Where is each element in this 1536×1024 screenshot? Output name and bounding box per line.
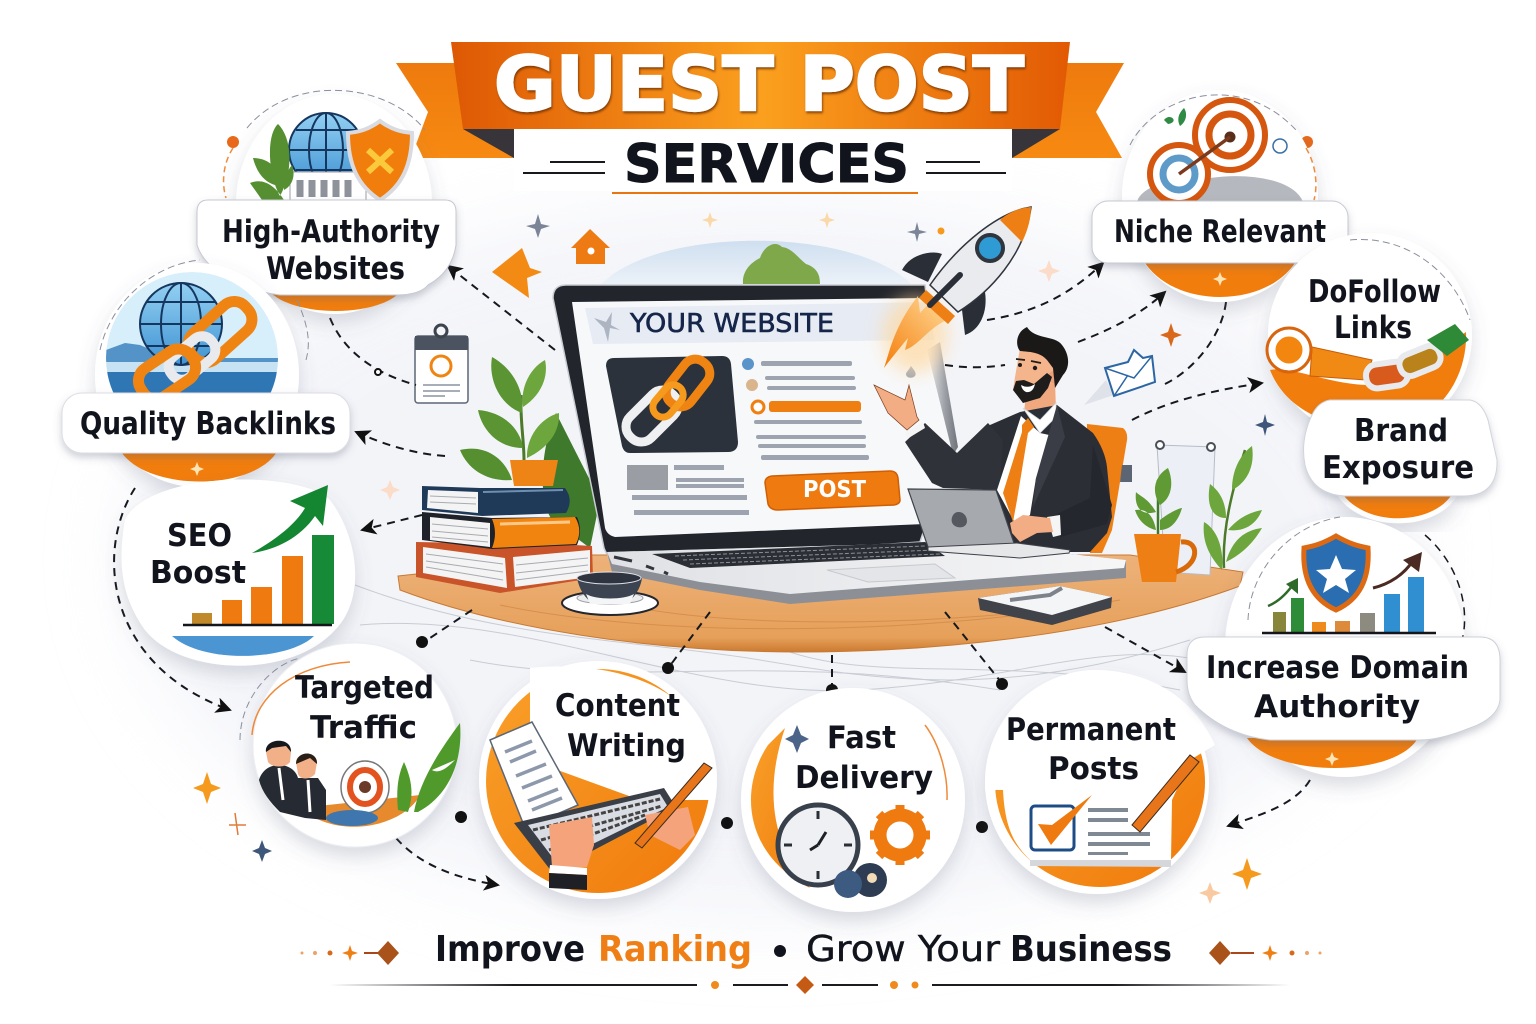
illustration disc	[106, 272, 278, 392]
coffee cup and saucer	[562, 572, 658, 615]
label text: Writing	[567, 728, 686, 764]
orange crescent	[751, 728, 810, 888]
link image tile	[606, 356, 738, 453]
label text: Websites	[266, 251, 405, 287]
label text: SEO	[167, 518, 232, 554]
tie	[1003, 418, 1034, 522]
label text	[295, 670, 434, 746]
icon: envelope	[1084, 350, 1155, 405]
small laptop	[908, 489, 1070, 558]
hands and sleeve	[549, 807, 695, 890]
rocket	[883, 207, 1031, 373]
middle book	[422, 512, 580, 549]
raised arm sleeve	[905, 423, 1003, 490]
label pill	[1092, 201, 1348, 263]
ear	[1048, 371, 1060, 383]
shirt collar	[1023, 403, 1056, 433]
tagline left ornament	[300, 941, 399, 965]
label text: Delivery	[795, 760, 933, 796]
orange base	[1142, 258, 1298, 297]
label text: Brand	[1354, 413, 1448, 449]
panel: fast delivery	[741, 688, 965, 912]
document	[490, 722, 578, 828]
document lines	[1088, 808, 1150, 855]
panel: niche relevant	[1092, 90, 1348, 302]
flame	[884, 296, 952, 368]
plane icon	[594, 312, 620, 342]
icon: clock	[778, 805, 858, 885]
laptop lid	[553, 285, 938, 562]
label text: Exposure	[1322, 450, 1474, 486]
label pill	[1187, 637, 1500, 740]
orange base	[1247, 738, 1418, 768]
icon: link key	[1267, 324, 1469, 390]
label text	[1322, 413, 1474, 486]
tagline text: Business	[1010, 929, 1172, 970]
raised cuff	[905, 422, 925, 439]
top book	[422, 486, 570, 516]
flame glow	[883, 297, 947, 373]
label text	[222, 214, 440, 287]
orange ground	[300, 795, 420, 827]
icon: plant	[397, 723, 460, 812]
white title area	[530, 666, 714, 800]
face	[1013, 348, 1058, 402]
title banner	[396, 40, 1124, 195]
panel: targeted traffic	[240, 643, 460, 847]
panel: brand exposure	[1304, 400, 1497, 521]
white cover	[985, 670, 1215, 860]
panel: dofollow links	[1267, 233, 1472, 437]
panel: high-authority websites	[197, 90, 456, 314]
icon: targets	[1150, 100, 1287, 203]
large plant behind laptop	[460, 357, 600, 548]
icon: shield	[1304, 536, 1368, 610]
chain	[133, 295, 258, 405]
neck	[1024, 380, 1056, 432]
icon: dark gears	[834, 863, 887, 898]
cloud	[1137, 176, 1303, 202]
label text: Targeted	[295, 670, 434, 706]
jacket torso	[982, 405, 1112, 552]
label pill	[1304, 400, 1497, 496]
label text	[555, 688, 686, 764]
laptop base	[607, 542, 1126, 604]
tagline right ornament	[1209, 941, 1322, 965]
label text	[795, 720, 933, 796]
subtitle text: services: SERVICES	[624, 134, 909, 195]
central desk scene	[398, 207, 1262, 652]
label pill	[197, 200, 456, 295]
right plant	[1204, 446, 1262, 570]
label text	[1206, 650, 1469, 725]
label text: Posts	[1048, 751, 1139, 787]
pencil	[635, 763, 712, 848]
band	[919, 290, 955, 324]
label text	[150, 518, 246, 591]
notebook	[978, 586, 1112, 625]
mug with plant	[1134, 468, 1195, 582]
label text: Permanent	[1006, 712, 1176, 748]
orange base	[268, 290, 402, 311]
chair	[1085, 424, 1132, 553]
label pill	[62, 393, 350, 453]
tagline text: Grow Your	[806, 929, 1000, 970]
icon: checkbox	[1031, 795, 1092, 850]
panel: quality backlinks	[62, 260, 350, 487]
keyboard	[514, 788, 676, 872]
cuff	[1047, 515, 1061, 537]
label text	[1006, 712, 1176, 787]
raised hand	[874, 385, 919, 430]
businessman	[874, 327, 1112, 552]
hanging paper	[1156, 441, 1215, 575]
title text: guest post: GUEST POST	[494, 40, 1024, 128]
panel: seo boost	[122, 480, 355, 666]
label text: High-Authority	[222, 214, 440, 250]
orange disc	[486, 669, 710, 893]
dashed connector arrows	[114, 263, 1310, 885]
subtitle rules	[523, 162, 1006, 193]
panel: increase domain authority	[1187, 517, 1500, 777]
chain icon	[620, 354, 715, 448]
icon: sparkle	[785, 725, 809, 753]
label text: Fast	[827, 720, 896, 756]
globe	[140, 283, 222, 365]
your website heading: YOUR WEBSITE	[629, 309, 834, 339]
subtitle panel	[514, 129, 1012, 191]
label text: Content	[555, 688, 680, 724]
icon: orange gear	[870, 805, 930, 865]
water strip	[172, 636, 314, 656]
fins	[902, 253, 942, 282]
icon: globe and shield	[250, 113, 412, 200]
shirt	[997, 416, 1063, 525]
laptop screen	[572, 298, 960, 537]
silver hinge side	[927, 342, 958, 455]
label text	[1308, 274, 1441, 346]
bar chart	[183, 485, 334, 625]
books stack	[416, 486, 593, 593]
label text: Quality Backlinks	[80, 406, 336, 442]
panel: permanent posts	[985, 670, 1215, 894]
right hand on laptop	[1010, 515, 1053, 542]
jacket lapel	[1033, 405, 1065, 507]
keyboard	[652, 542, 945, 568]
icon: people	[259, 741, 326, 820]
hair	[1017, 327, 1068, 388]
post button: POST	[803, 477, 866, 503]
eyes	[1016, 359, 1041, 370]
bottom book	[416, 542, 593, 593]
label text: Boost	[150, 555, 246, 591]
dome and tree	[598, 241, 915, 288]
tagline text: Improve	[435, 929, 585, 970]
website header bar	[585, 302, 934, 344]
icon: house	[571, 229, 610, 264]
orange base	[120, 450, 278, 482]
icon: orange star	[492, 248, 542, 298]
label text: Traffic	[310, 710, 417, 746]
tagline bullet	[774, 945, 786, 957]
bar chart	[1262, 552, 1436, 633]
label text: Authority	[1254, 689, 1420, 725]
beard	[1013, 373, 1052, 403]
right sleeve	[1055, 445, 1112, 537]
window	[977, 235, 1003, 261]
growth arrow	[252, 485, 328, 553]
label text: Links	[1334, 310, 1412, 346]
nose	[1000, 207, 1031, 242]
ribbon main	[451, 42, 1070, 129]
smile	[1021, 384, 1035, 392]
tagline	[300, 929, 1322, 970]
icon: clipboard	[415, 325, 468, 403]
label text: Increase Domain	[1206, 650, 1469, 686]
tagline text: Ranking	[598, 929, 752, 970]
orange crescent	[1270, 332, 1466, 422]
icon: pencil	[1132, 755, 1199, 832]
content lines	[627, 358, 916, 515]
label text: DoFollow	[1308, 274, 1441, 310]
trackpad	[827, 564, 955, 582]
connector lines: faint web under desk	[355, 585, 1200, 691]
icon: target	[326, 761, 389, 826]
footer rule	[330, 976, 1290, 994]
label text: Niche Relevant	[1114, 214, 1326, 250]
decorative sparkles	[193, 136, 1313, 904]
ribbon tails	[396, 63, 1124, 158]
body	[930, 207, 1031, 312]
ports	[614, 557, 668, 574]
post button	[765, 471, 900, 510]
panel: content writing	[479, 661, 717, 899]
desk	[398, 555, 1243, 652]
